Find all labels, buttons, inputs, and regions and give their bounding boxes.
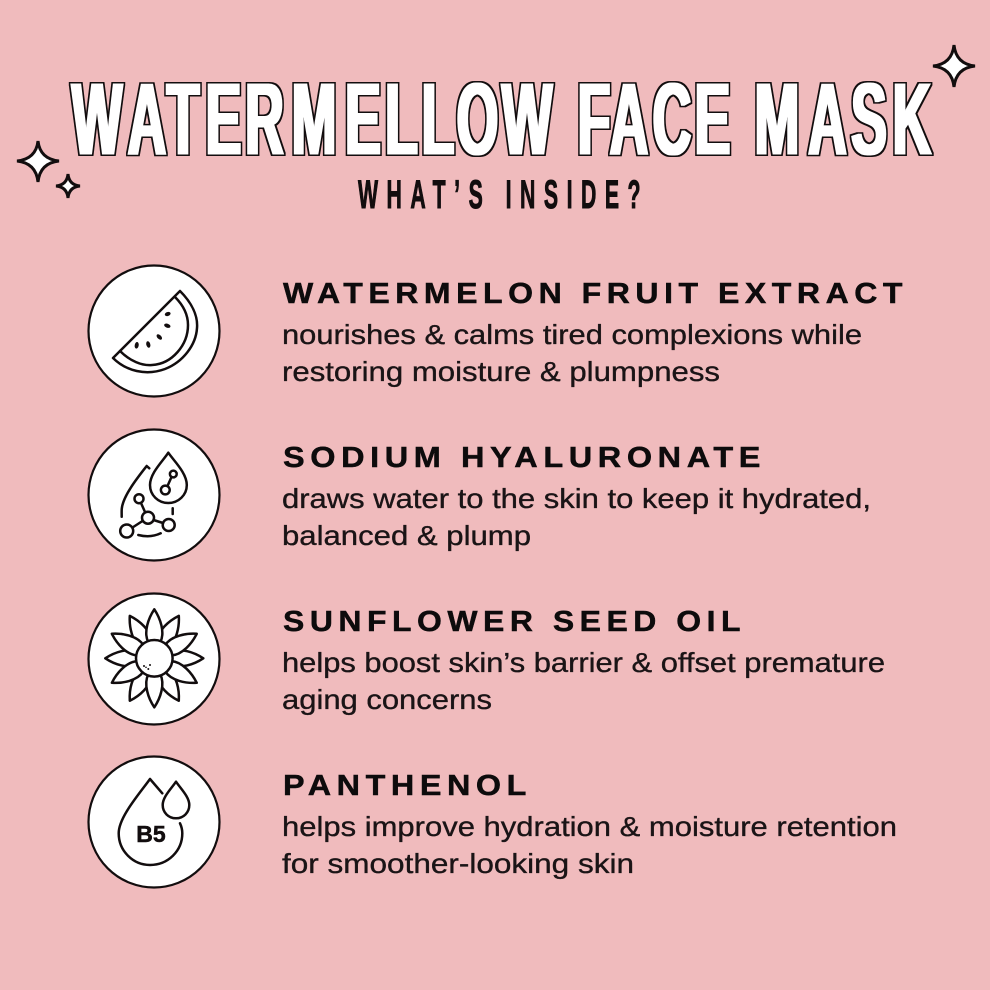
description: aging concerns: [282, 684, 492, 715]
title: WATERMELLOW FACE MASK: [72, 63, 931, 177]
panel: watermelon fruit extract: [88, 266, 908, 396]
icon label: B5: B5: [136, 821, 166, 847]
icon: B5 drops: [88, 756, 220, 888]
heading: WATERMELON FRUIT EXTRACT: [283, 278, 908, 310]
description: restoring moisture & plumpness: [282, 356, 720, 387]
description: [282, 811, 897, 879]
icon: sparkles left: [17, 141, 80, 198]
description: [282, 483, 871, 551]
icon: molecule and drops: [88, 430, 220, 560]
description: nourishes & calms tired complexions while: [282, 319, 862, 350]
icon: sunflower: [88, 594, 220, 724]
icon: watermelon slice: [88, 266, 220, 396]
description: helps improve hydration & moisture retention: [282, 811, 897, 842]
description: for smoother-looking skin: [282, 848, 634, 879]
description: [282, 647, 885, 715]
heading: SODIUM HYALURONATE: [283, 442, 766, 474]
panel: sunflower seed oil: [88, 594, 885, 724]
description: draws water to the skin to keep it hydrated,: [282, 483, 871, 514]
description: [282, 319, 862, 387]
panel: sodium hyaluronate: [88, 430, 871, 560]
heading: PANTHENOL: [283, 770, 532, 802]
subtitle: WHAT’S INSIDE?: [358, 173, 649, 217]
description: balanced & plump: [282, 520, 531, 551]
heading: SUNFLOWER SEED OIL: [283, 606, 746, 638]
description: helps boost skin’s barrier & offset premature: [282, 647, 885, 678]
panel: panthenol: [88, 756, 897, 888]
icon: sparkle top right: [933, 45, 975, 87]
